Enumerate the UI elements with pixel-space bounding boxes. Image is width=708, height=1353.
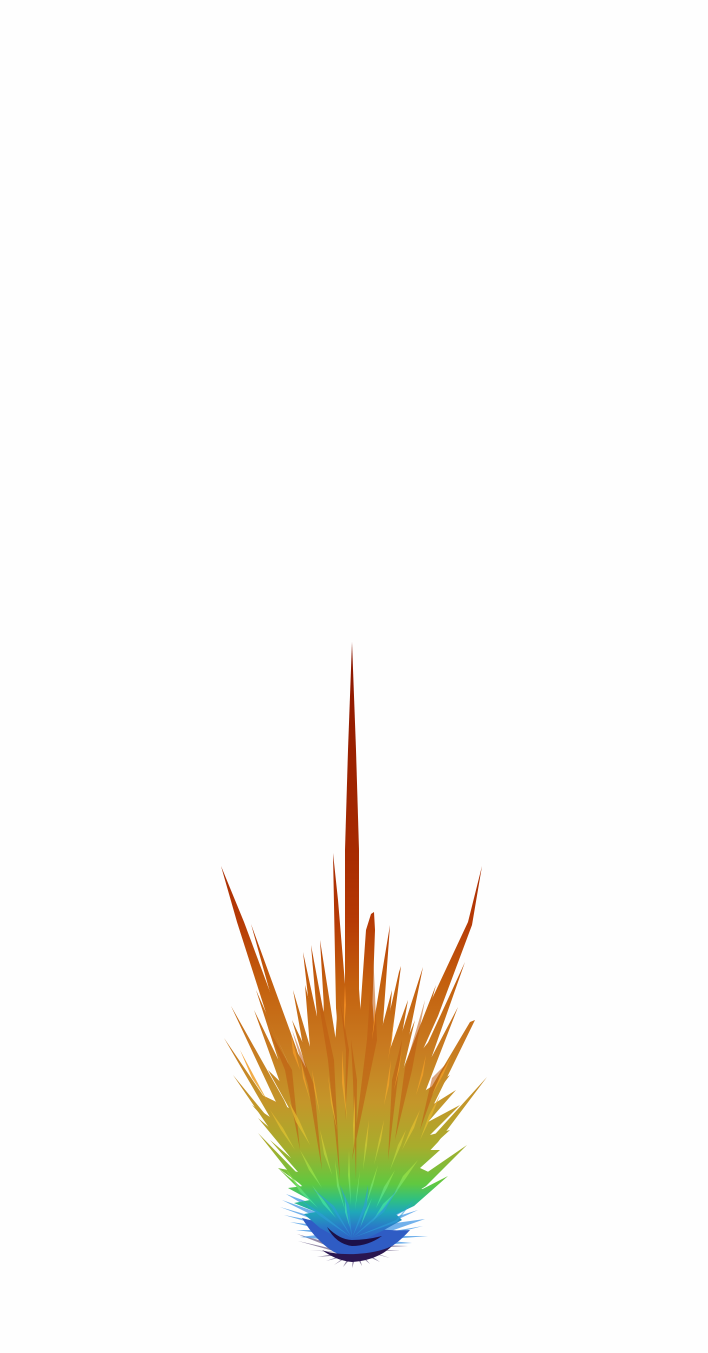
tallest central spike <box>345 642 359 1100</box>
blue centre rays <box>298 1185 415 1238</box>
dark crescent line <box>327 1227 382 1246</box>
dark spiky core <box>322 1246 392 1262</box>
blue crescent base <box>302 1218 410 1258</box>
bright highlight streaks <box>240 985 452 1228</box>
right large spike <box>380 866 482 1145</box>
darker inner streaks <box>268 950 450 1180</box>
outline spikes <box>221 642 487 1222</box>
low outer spikes <box>224 1038 487 1222</box>
secondary upper spikes <box>231 853 475 1174</box>
dark purple fringe spikes <box>297 1234 408 1268</box>
left large spike <box>221 866 325 1145</box>
blue outer fringe spikes <box>280 1194 428 1245</box>
interior fan of blades <box>252 970 460 1246</box>
